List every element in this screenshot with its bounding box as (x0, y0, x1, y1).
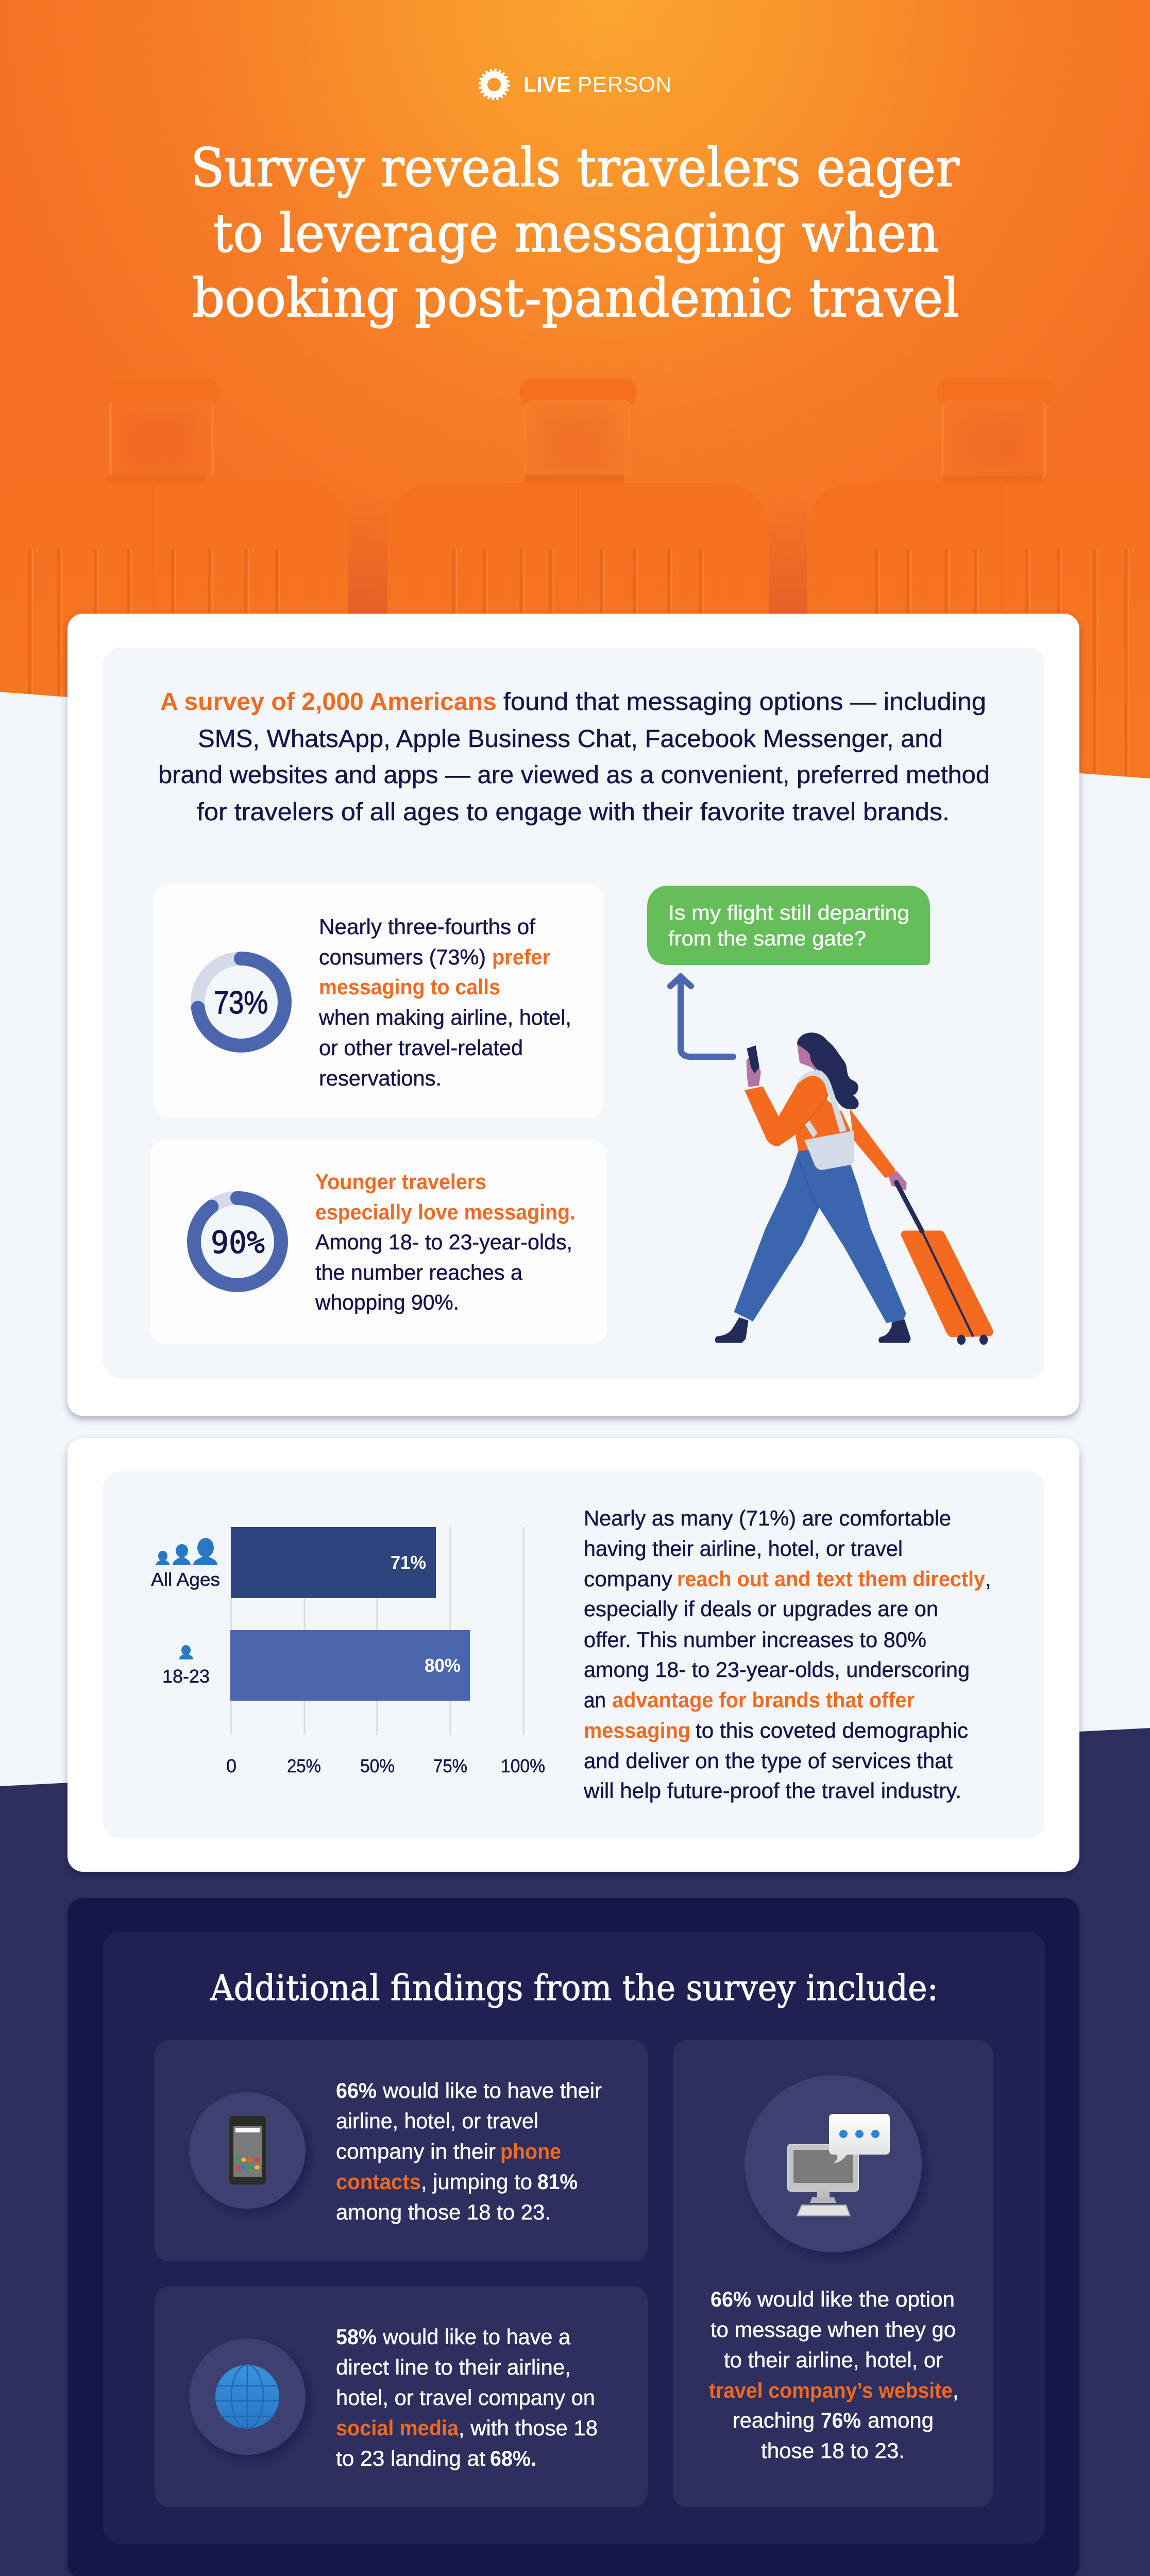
title (191, 137, 960, 329)
icon: smartphone (229, 2115, 266, 2185)
text: comfortable paragraph: offer. This number increases to 80% (584, 1628, 926, 1652)
illustration: traveler woman with suitcase (715, 1032, 993, 1345)
finding: phone contacts (155, 2040, 648, 2261)
intro paragraph: A survey of 2,000 Americans (160, 688, 497, 716)
finding: website (673, 2040, 993, 2507)
intro paragraph (158, 688, 990, 826)
hero: orange header with suitcases (0, 0, 1150, 824)
text: phone contacts (336, 2078, 602, 2224)
text: website: would like the option (757, 2287, 955, 2311)
text: 90% stat (315, 1170, 576, 1314)
finding: social media (155, 2286, 648, 2507)
text: comfortable paragraph: company (584, 1567, 672, 1591)
stat box: 90% (150, 1140, 607, 1343)
navy slanted band (0, 1728, 1150, 2576)
chat bubble (647, 886, 930, 965)
icon: people of all ages (156, 1538, 217, 1565)
text: 73% stat: or other travel-related (319, 1036, 523, 1060)
axis labels: 100% (501, 1755, 545, 1776)
suitcase 2 (452, 378, 704, 614)
text: 73% stat: reservations. (319, 1066, 442, 1090)
text: 73% stat (318, 914, 571, 1090)
title: booking post-pandemic travel (192, 267, 959, 329)
axis labels (226, 1755, 545, 1776)
icon: computer with chat bubble (788, 2114, 890, 2216)
icon: young person (179, 1645, 193, 1659)
logo: LivePerson white: LIVE (523, 72, 571, 96)
text: 90% stat: especially love messaging. (315, 1200, 576, 1224)
axis labels: 50% (360, 1755, 395, 1776)
text: comfortable paragraph: to this coveted demographic (696, 1718, 968, 1742)
text: comfortable paragraph: and deliver on the type of services that (584, 1749, 953, 1773)
text: 73% stat: consumers (73%) (319, 945, 486, 969)
text: social media: 58% (336, 2325, 377, 2349)
text: website: to message when they go (711, 2317, 956, 2342)
intro paragraph: SMS, WhatsApp, Apple Business Chat, Facebook Messenger, and (198, 725, 943, 753)
text: 90% stat: whopping 90%. (315, 1290, 459, 1314)
text: comfortable paragraph: having their airline, hotel, or travel (584, 1536, 903, 1561)
bar: 18-23 80% (230, 1630, 470, 1701)
panel: comfortable being texted (67, 1438, 1079, 1872)
text: comfortable paragraph: will help future-proof the travel industry. (583, 1778, 961, 1803)
logo: LivePerson white: PERSON (578, 72, 671, 96)
suitcase 3 (875, 379, 1150, 778)
text: comfortable paragraph: , (985, 1567, 991, 1591)
bar: all ages 71% (231, 1527, 436, 1598)
axis labels: 75% (433, 1755, 467, 1776)
text: comfortable paragraph: among 18- to 23-year-olds, underscoring (584, 1657, 970, 1682)
panel: intro card (67, 614, 1079, 1416)
panel: additional findings (67, 1898, 1079, 2576)
text: phone contacts: , jumping to (421, 2170, 532, 2194)
intro paragraph: brand websites and apps — are viewed as a convenient, preferred method (158, 761, 990, 789)
text: comfortable paragraph: messaging (584, 1718, 690, 1742)
text: social media: social media (336, 2416, 459, 2440)
text: social media: direct line to their airline, (336, 2355, 571, 2379)
logo: LivePerson white (480, 70, 671, 99)
axis labels: 0 (226, 1755, 236, 1776)
bar chart (151, 1527, 545, 1776)
donut: 73% (198, 958, 284, 1046)
text: 73% stat: messaging to calls (319, 975, 500, 999)
text: comfortable paragraph: advantage for brands that offer (612, 1688, 915, 1712)
text: website: among (868, 2408, 934, 2432)
donut: 90% (194, 1198, 281, 1285)
text: comfortable paragraph (583, 1506, 991, 1803)
text: website (709, 2287, 959, 2463)
text: website: 76% (821, 2408, 861, 2432)
text: comfortable paragraph: especially if deals or upgrades are on (584, 1597, 938, 1621)
text: phone contacts: would like to have their (382, 2078, 602, 2103)
heading: additional findings: Additional findings from the survey include: (210, 1968, 938, 2009)
text: website: 66% (711, 2287, 751, 2311)
arrow (670, 976, 733, 1057)
icon: globe (215, 2365, 279, 2429)
text: website: those 18 to 23. (761, 2438, 905, 2463)
text: social media: , with those 18 (459, 2416, 598, 2440)
axis labels: 25% (287, 1755, 321, 1776)
intro paragraph: found that messaging options — including (503, 688, 986, 716)
donut: 73%: 73% (214, 985, 268, 1021)
text: phone contacts: contacts (336, 2170, 421, 2194)
text: website: , (953, 2378, 959, 2402)
text: website: travel company’s website (709, 2378, 953, 2402)
text: phone contacts: 66% (336, 2078, 377, 2103)
bar: 18-23 80%: 80% (425, 1655, 461, 1676)
chat bubble: Is my flight still departing (668, 902, 909, 924)
stat box: 73% (154, 884, 603, 1118)
text: social media: hotel, or travel company on (336, 2385, 595, 2410)
label: all ages: All Ages (151, 1569, 220, 1590)
title: Survey reveals travelers eager (191, 137, 960, 199)
text: phone contacts: airline, hotel, or travel (336, 2109, 538, 2133)
text: comfortable paragraph: reach out and text them directly (677, 1567, 986, 1591)
text: phone contacts: 81% (537, 2170, 578, 2194)
text: phone contacts: company in their (336, 2139, 496, 2163)
text: 73% stat: Nearly three-fourths of (319, 914, 535, 939)
chat bubble: from the same gate? (668, 927, 866, 950)
text: phone contacts: among those 18 to 23. (336, 2200, 551, 2224)
text: social media: would like to have a (382, 2325, 571, 2349)
bar: all ages 71%: 71% (391, 1552, 426, 1573)
text: 90% stat: Younger travelers (315, 1170, 486, 1194)
intro paragraph: for travelers of all ages to engage with their favorite travel brands. (197, 799, 950, 826)
text: website: reaching (733, 2408, 815, 2432)
text: 90% stat: Among 18- to 23-year-olds, (315, 1230, 572, 1254)
text: social media (336, 2325, 598, 2470)
text: social media: 68%. (490, 2446, 536, 2470)
text: comfortable paragraph: an (584, 1688, 606, 1712)
label: 18-23: 18-23 (162, 1666, 210, 1687)
text: website: to their airline, hotel, or (724, 2348, 943, 2372)
suitcase 1 (0, 402, 280, 697)
text: comfortable paragraph: Nearly as many (71%) are comfortable (584, 1506, 951, 1530)
text: 73% stat: prefer (492, 945, 550, 969)
text: phone contacts: phone (500, 2139, 561, 2163)
donut: 90%: 90% (211, 1225, 265, 1261)
text: social media: to 23 landing at (336, 2446, 485, 2470)
text: 73% stat: when making airline, hotel, (318, 1005, 571, 1029)
text: 90% stat: the number reaches a (315, 1260, 523, 1284)
title: to leverage messaging when (213, 202, 939, 264)
